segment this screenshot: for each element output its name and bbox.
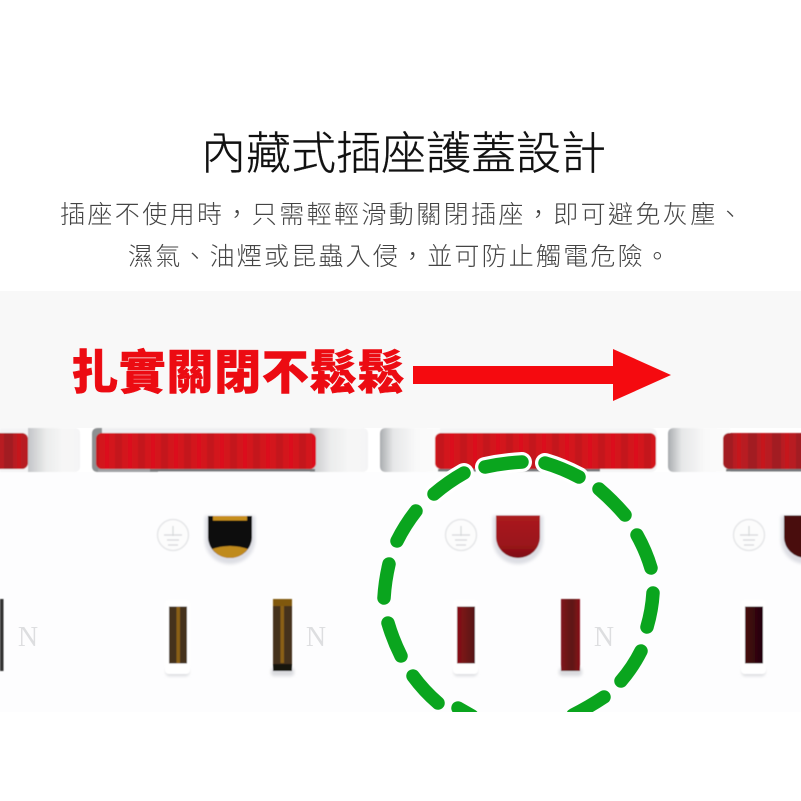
description text [60, 201, 745, 271]
socket 2: ground symbol, ground hole, slots [446, 516, 582, 676]
N markers: N [594, 622, 614, 653]
arrow pointing right [413, 349, 671, 401]
dashed green circle highlight [384, 462, 653, 716]
socket 3: ground symbol, ground hole, slot [734, 516, 801, 676]
N markers [18, 627, 614, 646]
description text: 濕氣、油煙或昆蟲入侵，並可防止觸電危險。 [128, 243, 672, 271]
headline: secure closure: 扎實關閉不鬆鬆 [71, 346, 405, 399]
socket 1: ground symbol, ground hole, slots [0, 516, 294, 676]
N markers: N [18, 622, 38, 653]
sliding covers row [0, 428, 801, 472]
panel: product photo [0, 348, 801, 712]
N markers: N [306, 622, 326, 653]
description text: 插座不使用時，只需輕輕滑動關閉插座，即可避免灰塵、 [60, 201, 745, 229]
title: 內藏式插座護蓋設計 [201, 128, 606, 179]
